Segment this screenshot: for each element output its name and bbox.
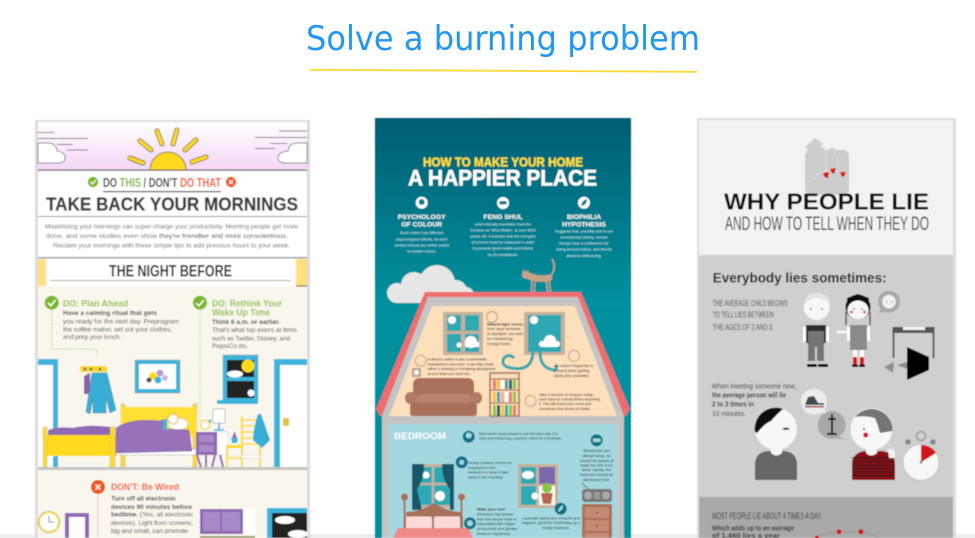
text: when meeting someone new: When meeting someone new,	[712, 381, 796, 390]
tip: be wired: Turn off all electronic	[111, 496, 177, 503]
note: tidy room: room back to normal before departing	[539, 396, 600, 402]
note: blue lowers blood pressure: calm and reassuring, a perfect colour for a bedroom.	[479, 436, 562, 440]
column: biophilia hypothesis	[555, 197, 614, 258]
intro text: done, and some studies even show they're friendlier and more conscientious.	[46, 233, 288, 240]
radio	[582, 483, 612, 502]
bed with headboard	[393, 494, 473, 538]
text: average child	[713, 298, 788, 332]
note: air rooms: Air rooms frequently to	[554, 363, 593, 368]
cat on the roof	[522, 259, 554, 295]
note: electronics: Electronics can	[584, 448, 610, 453]
icon: speech bubble with face	[878, 291, 900, 313]
note: natural light: or skylights, are best	[487, 331, 524, 336]
tip: plan ahead: DO: Plan Ahead	[63, 299, 128, 309]
dotted arc with red dots	[815, 529, 878, 538]
floor line	[38, 467, 307, 470]
column: psychology of colour: PSYCHOLOGY	[398, 214, 446, 221]
note: make your bed: productivity and greater	[477, 526, 518, 531]
tip: rethink your wake up time: DO: Rethink Your	[212, 299, 283, 309]
note: natural light: Natural light rooms,	[487, 322, 524, 326]
note: electronics: electronics free.	[583, 477, 610, 482]
column: feng shui: years old. It teaches that the energies	[471, 234, 535, 238]
text: most people lie about 4 times a day: MOST PEOPLE LIE ABOUT 4 TIMES A DAY.	[712, 511, 822, 521]
note: dimmer switch: investment in any room: it can help create	[428, 362, 494, 366]
section band: the night before: THE NIGHT BEFORE	[109, 262, 232, 281]
note: natural light: energy levels.	[487, 341, 511, 346]
illustration: man talking with raised hand	[850, 408, 895, 480]
section band: the night before	[38, 259, 307, 286]
column: biophilia hypothesis: HYPOTHESIS	[562, 222, 606, 229]
icon: wall clock	[38, 511, 60, 533]
heading: a happier place: A HAPPIER PLACE	[408, 166, 597, 191]
note: natural light: from large windows	[487, 326, 521, 331]
column: feng shui: Chinese as 'Wind Water', is over 3000	[470, 228, 537, 232]
column: feng shui: for its inhabitants.	[488, 252, 518, 257]
note: electronics: beds. Ideally, the	[582, 467, 611, 472]
right door	[274, 359, 307, 467]
note: make your bed: Make your bed!	[477, 506, 506, 512]
text: lies a year	[712, 523, 794, 538]
tip: rethink your wake up time: That's what top execs at firms	[212, 327, 297, 334]
stool, plant and chair with towel	[226, 414, 270, 467]
note: natural light: for maintaining	[487, 336, 513, 341]
sky header	[38, 122, 307, 170]
note: dimmer switch: either a relaxing or energising atmosphere	[428, 366, 496, 371]
clouds and wind lines	[38, 131, 307, 163]
cream background	[38, 286, 307, 538]
note: make your bed: that this simple habit is	[477, 516, 516, 522]
panel: take back your mornings infographic	[35, 120, 310, 538]
purple door	[65, 513, 89, 538]
sofa	[405, 378, 482, 416]
heading: do this / don't do that: DO THIS / DON'T DO THAT	[103, 175, 221, 190]
note: lavender: fragrant, great for freshening up a	[522, 520, 581, 525]
note: natural light	[486, 312, 524, 346]
bed	[43, 404, 197, 467]
illustration: girl	[837, 294, 870, 367]
note: heavy curtains: Heavy curtains should be	[468, 460, 512, 465]
note: electronics: disrupt sleep, so	[583, 453, 611, 458]
note: blue lowers blood pressure: Blue lowers blood pressure and the heart rate, it is	[479, 431, 558, 436]
column: biophilia hypothesis: beings have a preference for	[559, 240, 609, 246]
column: biophilia hypothesis: BIOPHILIA	[567, 214, 601, 221]
title: Solve a burning problem	[306, 19, 700, 59]
nightstand with clock and lamp	[196, 409, 228, 467]
panel: happier home infographic	[375, 118, 631, 538]
column: biophilia hypothesis: absence distressing.	[566, 253, 602, 258]
text: lies a year: Which adds up to an average	[712, 523, 794, 532]
note: tidy room: Take 3 minutes to bring an untidy	[539, 392, 593, 397]
note: heavy curtains: employed in the	[468, 465, 495, 470]
text: average child: TO TELL LIES BETWEEN	[713, 310, 774, 320]
note: make your bed	[464, 506, 518, 536]
column: biophilia hypothesis: being around nature, and find its	[556, 246, 612, 252]
left door	[38, 359, 58, 467]
text: when meeting someone new: 2 to 3 times in	[712, 400, 754, 409]
note: tidy room: counteract the stress of clutter.	[539, 406, 591, 411]
illustration: bedroom scene	[38, 355, 307, 470]
tip: rethink your wake up time	[193, 296, 297, 422]
tip: plan ahead: and prep your lunch.	[63, 334, 121, 341]
curtained window	[412, 464, 454, 510]
column: feng shui: of a home must be balanced in order	[471, 240, 535, 244]
note: air rooms	[554, 350, 593, 378]
note: heavy curtains: bedroom to keep it dark	[468, 470, 509, 474]
illustration: table with shadow	[884, 327, 934, 380]
note: electronics: bedroom should be	[580, 472, 613, 477]
heading: how to make your home: HOW TO MAKE YOUR HOME	[423, 155, 583, 170]
note: blue lowers blood pressure	[463, 431, 562, 443]
note: air rooms: stuffy and unhealthy.	[554, 373, 590, 378]
bookshelf	[490, 373, 519, 416]
panel: why people lie infographic	[697, 118, 956, 538]
intro text: Reclaim your mornings with these simple tips to add precious hours to your week.	[53, 242, 290, 250]
tip: rethink your wake up time: Think 6 a.m. or earlier.	[212, 319, 280, 326]
heading: everybody lies sometimes: Everybody lies sometimes:	[713, 270, 887, 286]
house walls and bedroom	[382, 416, 624, 538]
icon: stopwatch	[903, 432, 939, 480]
heading: bedroom: BEDROOM	[394, 431, 446, 442]
teal swirls	[503, 352, 556, 370]
tip: be wired: big and small, can promote	[111, 528, 189, 535]
note: make your bed: associated with higher	[477, 521, 516, 526]
column: psychology of colour: Each colour has different	[400, 230, 444, 235]
column: feng shui: to promote good health and fortune	[473, 246, 533, 250]
note: lavender	[522, 503, 581, 530]
note: dimmer switch: A dimmer switch is also a worthwhile	[428, 356, 487, 362]
intro text	[45, 224, 298, 250]
text: average child: THE AVERAGE CHILD BEGINS	[713, 298, 788, 308]
column: feng shui: FENG SHUI,	[484, 214, 523, 221]
icon: crossed-fingers hand	[805, 138, 849, 195]
intro text: Maximizing your mornings can super-charge your productivity. Morning people get more	[45, 224, 298, 230]
window at night	[217, 355, 258, 404]
note: dimmer switch: as and when you need one.	[428, 371, 471, 376]
note: make your bed: levels of happiness.	[477, 531, 511, 536]
attic window left	[443, 312, 483, 355]
tip: plan ahead: Have a calming ritual that gets	[63, 310, 158, 317]
tip: plan ahead: the coffee maker, set out your clothes,	[63, 327, 172, 334]
note: heavy curtains: early in the morning.	[468, 474, 503, 480]
attic window right	[524, 312, 565, 355]
illustration: man listening	[755, 408, 797, 480]
dresser	[582, 504, 612, 538]
text: when meeting someone new	[712, 381, 796, 418]
cloud	[387, 265, 474, 303]
tip: be wired: devices). Light from screens,	[111, 520, 193, 527]
note: electronics: least two feet from	[581, 462, 613, 468]
window bottom right	[267, 508, 308, 538]
house roof	[376, 292, 630, 416]
column: biophilia hypothesis: Suggests that, possibly due to our	[555, 228, 614, 234]
text: when meeting someone new: 10 minutes.	[712, 409, 746, 418]
note: lavender: Lavender plants are colourful and	[522, 516, 580, 520]
tip: plan ahead	[45, 296, 179, 356]
column: biophilia hypothesis: evolutionary history, human	[560, 234, 608, 240]
coat rack and shirt	[80, 366, 116, 414]
column: psychology of colour: OF COLOUR	[401, 222, 442, 229]
tip: be wired	[91, 480, 193, 538]
column: psychology of colour: certain colours are better suited	[394, 242, 449, 248]
note: lavender: musty bedroom.	[542, 525, 570, 530]
note: dimmer switch	[412, 355, 496, 377]
purple cabinet	[200, 509, 255, 538]
note: air rooms: prevent them getting	[554, 368, 589, 373]
text: when meeting someone new: the average person will lie	[712, 390, 786, 399]
tip: be wired: devices 90 minutes before	[111, 504, 193, 511]
column: psychology of colour: psychological effects, as such	[396, 236, 447, 242]
column: psychology of colour	[394, 197, 449, 254]
note: make your bed: Research has shown	[477, 512, 513, 516]
illustration: boy	[803, 293, 830, 367]
column: psychology of colour: to certain rooms.	[407, 248, 436, 254]
column: feng shui	[470, 197, 537, 257]
tip: rethink your wake up time: PepsiCo do.	[212, 343, 248, 350]
note: tidy room	[525, 392, 600, 411]
tip: be wired: DON'T: Be Wired	[111, 482, 179, 492]
framed picture	[135, 360, 180, 393]
tip: plan ahead: you ready for the next day. Preprogram	[63, 318, 179, 325]
title underline	[310, 70, 697, 72]
icon: sun with rays	[130, 130, 206, 170]
text: average child: THE AGES OF 2 AND 3.	[713, 322, 774, 332]
heading: take back your mornings: TAKE BACK YOUR MORNINGS	[46, 194, 298, 215]
note: tidy room: it. This will boost your mood and	[539, 401, 591, 406]
tip: be wired: bedtime. (Yes, all electronic	[111, 512, 193, 519]
tip: rethink your wake up time: Wake Up Time	[212, 308, 270, 318]
note: heavy curtains	[456, 456, 512, 480]
speech bubbles with icons	[801, 389, 848, 439]
column: feng shui: which literally translates from the	[475, 222, 531, 226]
note: electronics	[580, 434, 614, 482]
tip: rethink your wake up time: such as Twitter, Disney, and	[212, 336, 291, 343]
heading: why people lie: WHY PEOPLE LIE	[724, 188, 929, 214]
note: electronics: should be placed at	[580, 458, 614, 463]
window with plant	[518, 464, 558, 508]
